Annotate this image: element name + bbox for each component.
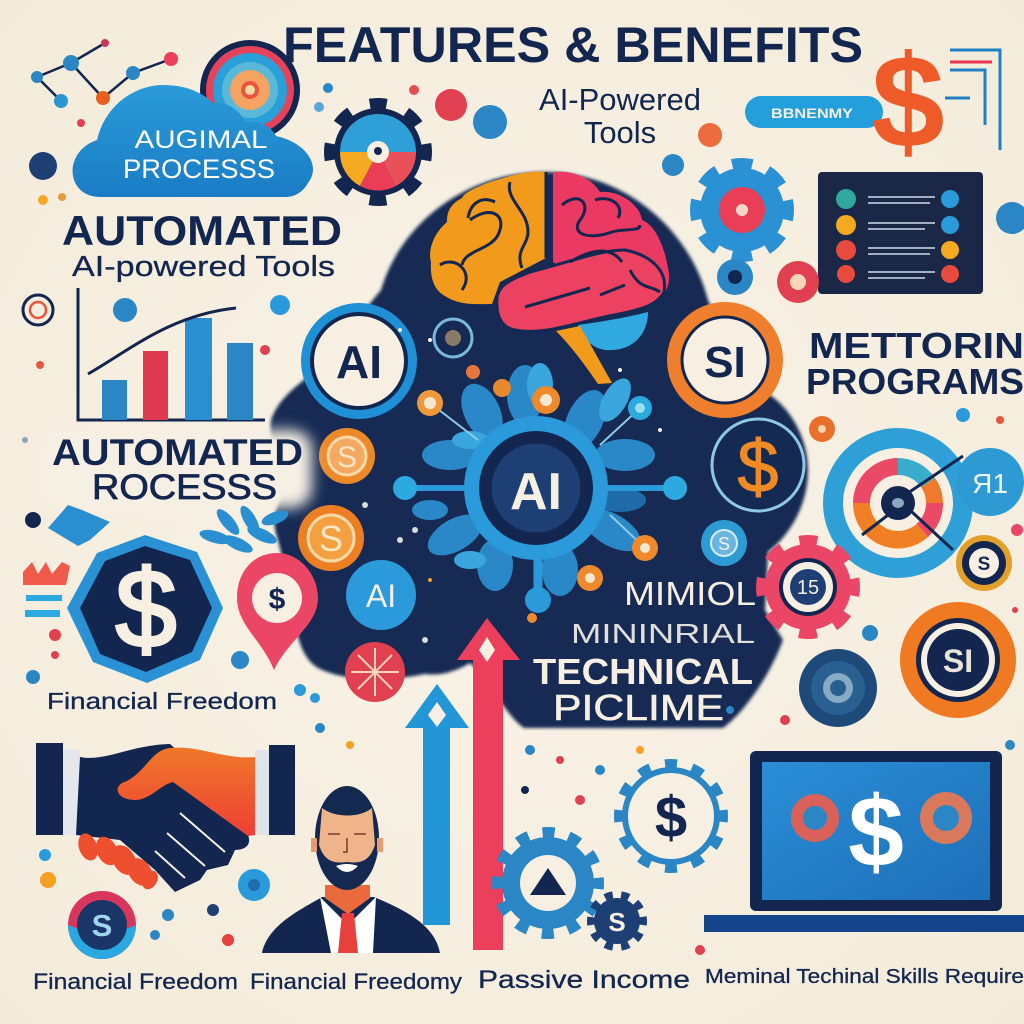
small blue ring — [238, 869, 270, 901]
handshake: right cuff — [269, 745, 295, 835]
handshake: orange hand — [118, 748, 255, 836]
red pin with dollar: $ — [269, 583, 286, 616]
ring badge SI — [900, 602, 1016, 718]
red crown and blue stripes icon — [23, 562, 70, 617]
text: minimal technical: MIMIOL — [624, 575, 756, 612]
glow behind automated process label — [42, 430, 312, 508]
red gear coin: 15 — [797, 577, 819, 599]
central dark head silhouette — [270, 172, 808, 728]
portrait: suit — [262, 897, 440, 953]
coin: dollar lower left: S — [319, 518, 343, 559]
badge: AI left — [301, 303, 417, 419]
dollar sign top right — [871, 28, 1000, 175]
coin: small orange: S — [978, 554, 990, 575]
red up arrow — [457, 618, 520, 950]
brain: fold lines — [440, 172, 660, 307]
heading: automated process: AUTOMATED — [52, 432, 303, 473]
red gear coin — [761, 540, 855, 634]
small dark gear: S — [608, 907, 626, 937]
portrait: neck — [325, 885, 370, 914]
small ring icon in head — [434, 319, 472, 357]
small coin in head: S — [718, 534, 730, 554]
dollar coin: right: $ — [737, 425, 779, 508]
gear target icon — [332, 106, 424, 198]
small coin in head — [701, 520, 747, 566]
blue up arrow — [405, 684, 469, 925]
handshake: navy hand — [76, 744, 249, 892]
cloud: augmental process: PROCESSS — [123, 154, 275, 184]
bottom labels — [33, 966, 1024, 994]
coin: dollar lower left — [298, 505, 364, 571]
text: minimal technical: TECHNICAL — [533, 651, 753, 692]
hub: blue petals — [412, 365, 655, 596]
laptop — [704, 751, 1024, 932]
brain: orange stem — [556, 326, 612, 384]
ring badge SI: SI — [943, 643, 973, 679]
heading: automated process: ROCESSS — [92, 468, 277, 507]
bar chart — [23, 288, 265, 420]
target icon top left — [200, 40, 300, 140]
dollar sign top right: $ — [871, 28, 945, 175]
central AI hub: AI — [510, 463, 562, 521]
cloud: augmental process: AUGIMAL — [134, 126, 268, 154]
handshake: red fingers — [75, 831, 161, 892]
bottom labels: Passive Income — [478, 966, 690, 994]
large gear icon — [498, 833, 598, 933]
heading: automated: AUTOMATED — [62, 207, 342, 254]
orange node right of head — [809, 416, 835, 442]
handshake: left cuff — [36, 743, 63, 835]
central AI hub — [393, 363, 687, 613]
small blue RI badge — [956, 448, 1024, 516]
benefit pill label — [745, 96, 883, 128]
portrait: features — [328, 834, 366, 852]
small S coin bottom left: S — [92, 908, 112, 943]
red pin with dollar — [237, 553, 318, 670]
coin: dollar upper left: S — [337, 441, 357, 474]
badge: SI right: SI — [704, 338, 746, 387]
coin: dollar upper left — [319, 428, 375, 484]
brain: pink upper lobe — [553, 172, 669, 300]
gear icon right — [696, 164, 788, 295]
dashboard panel — [818, 172, 983, 294]
handshake — [36, 743, 295, 892]
bottom labels: Financial Freedom — [33, 969, 238, 994]
bottom labels: Meminal Techinal Skills Require — [705, 966, 1024, 988]
badge: AI left: AI — [336, 336, 382, 388]
badge: AI small — [346, 560, 416, 630]
brain: orange left lobe — [430, 172, 546, 304]
brain: pink lower fold — [497, 250, 665, 331]
portrait: smile — [336, 864, 358, 872]
subtitle: AI-powered tools — [539, 82, 701, 150]
cloud: augmental process — [73, 85, 313, 197]
heading: mentoring programs: METTORIN — [809, 325, 1024, 366]
subtitle: AI-powered tools: Tools — [584, 115, 656, 150]
small dark gear — [591, 895, 643, 947]
subtitle: AI-powered tools: AI-Powered — [539, 82, 701, 117]
gear dollar icon — [619, 764, 723, 868]
title: FEATURES & BENEFITS — [283, 17, 863, 73]
dark circular icon — [799, 649, 877, 727]
portrait: ears — [311, 838, 383, 852]
dollar coin: right — [712, 419, 804, 511]
gear dollar icon: $ — [655, 785, 687, 850]
small S coin bottom left — [68, 891, 136, 959]
businessman portrait — [262, 786, 440, 953]
portrait: shirt — [320, 897, 376, 953]
label: financial freedom: Financial Freedom — [47, 688, 277, 714]
portrait: tie — [338, 913, 358, 953]
portrait: face — [319, 808, 375, 862]
hub: connector lines — [405, 403, 680, 598]
coin: small orange — [956, 535, 1012, 591]
laptop: $ — [848, 776, 904, 888]
heading: automated process — [52, 432, 303, 507]
map pin near dashboard — [777, 261, 819, 303]
red burst icon — [345, 642, 405, 702]
heading: mentoring programs: PROGRAMS — [806, 361, 1024, 402]
heading: mentoring programs — [806, 325, 1024, 402]
octagon dollar badge — [67, 535, 223, 683]
small blue RI badge: Я1 — [972, 468, 1008, 499]
bottom labels: Financial Freedomy — [250, 969, 462, 994]
text: minimal technical: MININRIAL — [571, 618, 755, 649]
octagon dollar badge: $ — [115, 548, 177, 671]
benefit pill label: BBNENMY — [771, 105, 854, 121]
text: minimal technical: PICLIME — [553, 687, 724, 728]
text: minimal technical — [533, 575, 756, 728]
brain — [430, 172, 669, 384]
leaf sprig — [198, 503, 290, 556]
network graph icon — [31, 39, 178, 108]
badge: AI small: AI — [366, 578, 396, 614]
blue bird shape — [48, 505, 110, 546]
badge: SI right — [667, 302, 783, 418]
blue dot at right edge — [996, 202, 1024, 234]
brain: blue cerebellum — [578, 312, 648, 350]
heading: AI-powered tools: AI-powered Tools — [72, 251, 335, 283]
portrait: hair and beard — [315, 786, 379, 890]
target dial icon — [823, 428, 973, 578]
